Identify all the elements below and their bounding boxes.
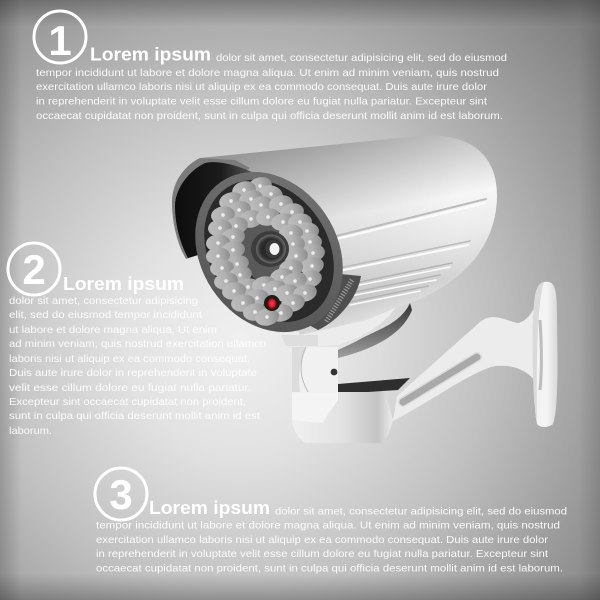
camera face xyxy=(165,144,373,360)
text block 3 xyxy=(96,506,567,574)
inner ring xyxy=(178,155,360,347)
top plate xyxy=(281,308,395,346)
text block 1: tempor incididunt ut labore et dolore magna aliqua. Ut enim ad minim veniam, quis nostrud xyxy=(36,68,499,79)
text block 2 xyxy=(9,296,266,437)
heading 1: Lorem ipsum xyxy=(90,44,211,64)
text block 2: dolor sit amet, consectetur adipisicing xyxy=(9,296,198,307)
screw xyxy=(331,369,337,375)
text block 1: in reprehenderit in voluptate velit esse cillum dolore eu fugiat nulla pariatur. Excepteur sint xyxy=(36,96,487,108)
text block 2: laboris nisi ut aliquip ex ea commodo consequat. xyxy=(9,354,250,365)
lens plate xyxy=(221,193,323,303)
number badge 2: 2 xyxy=(22,246,46,293)
text block 2: Duis aute irure dolor in reprehenderit in voluptate xyxy=(9,368,257,379)
text block 3: occaecat cupidatat non proident, sunt in culpa qui officia deserunt mollit anim id est laborum. xyxy=(96,564,563,574)
number badge 3 xyxy=(95,468,147,520)
text block 1: dolor sit amet, consectetur adipisicing elit, sed do eiusmod xyxy=(216,53,507,64)
hood xyxy=(172,158,250,259)
heading 3: Lorem ipsum xyxy=(149,497,270,518)
text block 2: Excepteur sint occaecat cupidatat non proident, xyxy=(9,397,246,408)
wall plate xyxy=(533,282,558,427)
cable xyxy=(338,303,412,358)
camera body xyxy=(172,136,497,335)
heading 2: Lorem ipsum xyxy=(63,273,184,294)
text block 1: exercitation ullamco laboris nisi ut aliquip ex ea commodo consequat. Duis aute irure dolor xyxy=(36,82,488,93)
text block 2: laborum. xyxy=(9,426,52,437)
number badge 1: 1 xyxy=(48,17,72,64)
text block 2: elit, sed do eiusmod tempor incididunt xyxy=(9,310,202,321)
text block 3: exercitation ullamco laboris nisi ut aliquip ex ea commodo consequat. Duis aute irure dolor xyxy=(96,535,549,546)
text block 3: tempor incididunt ut labore et dolore magna aliqua. Ut enim ad minim veniam, quis nostrud xyxy=(96,520,560,532)
section 2 xyxy=(8,243,266,437)
outer ring xyxy=(165,144,373,360)
swivel column xyxy=(292,347,338,393)
lower block xyxy=(292,392,393,443)
section 1 xyxy=(34,11,507,122)
text block 1 xyxy=(36,53,507,122)
text block 1: occaecat cupidatat non proident, sunt in culpa qui officia deserunt mollit anim id est laborum. xyxy=(36,111,503,122)
red indicator light xyxy=(264,295,280,311)
text block 2: ad minim veniam, quis nostrud exercitation ullamco xyxy=(9,339,266,350)
mount arm xyxy=(393,303,537,421)
text block 2: ut labore et dolore magna aliqua. Ut enim xyxy=(9,325,217,336)
arm slot xyxy=(403,357,477,402)
text block 2: velit esse cillum dolore eu fugiat nulla pariatur. xyxy=(9,383,251,394)
cooling fins xyxy=(328,199,486,305)
wall mount bracket xyxy=(281,282,558,443)
text block 2: sunt in culpa qui officia deserunt mollit anim id est xyxy=(9,411,260,422)
text block 3: dolor sit amet, consectetur adipisicing elit, sed do eiusmod xyxy=(275,506,567,518)
number badge 2 xyxy=(8,243,60,295)
section 3 xyxy=(95,468,567,574)
number badge 1 xyxy=(34,11,86,64)
grill flap xyxy=(300,274,361,330)
lens xyxy=(251,231,289,267)
LED array xyxy=(205,175,326,328)
arm shadow strip xyxy=(338,378,410,394)
text block 3: in reprehenderit in voluptate velit esse cillum dolore eu fugiat nulla pariatur. Excepteur sint xyxy=(96,549,548,560)
number badge 3: 3 xyxy=(109,471,133,518)
